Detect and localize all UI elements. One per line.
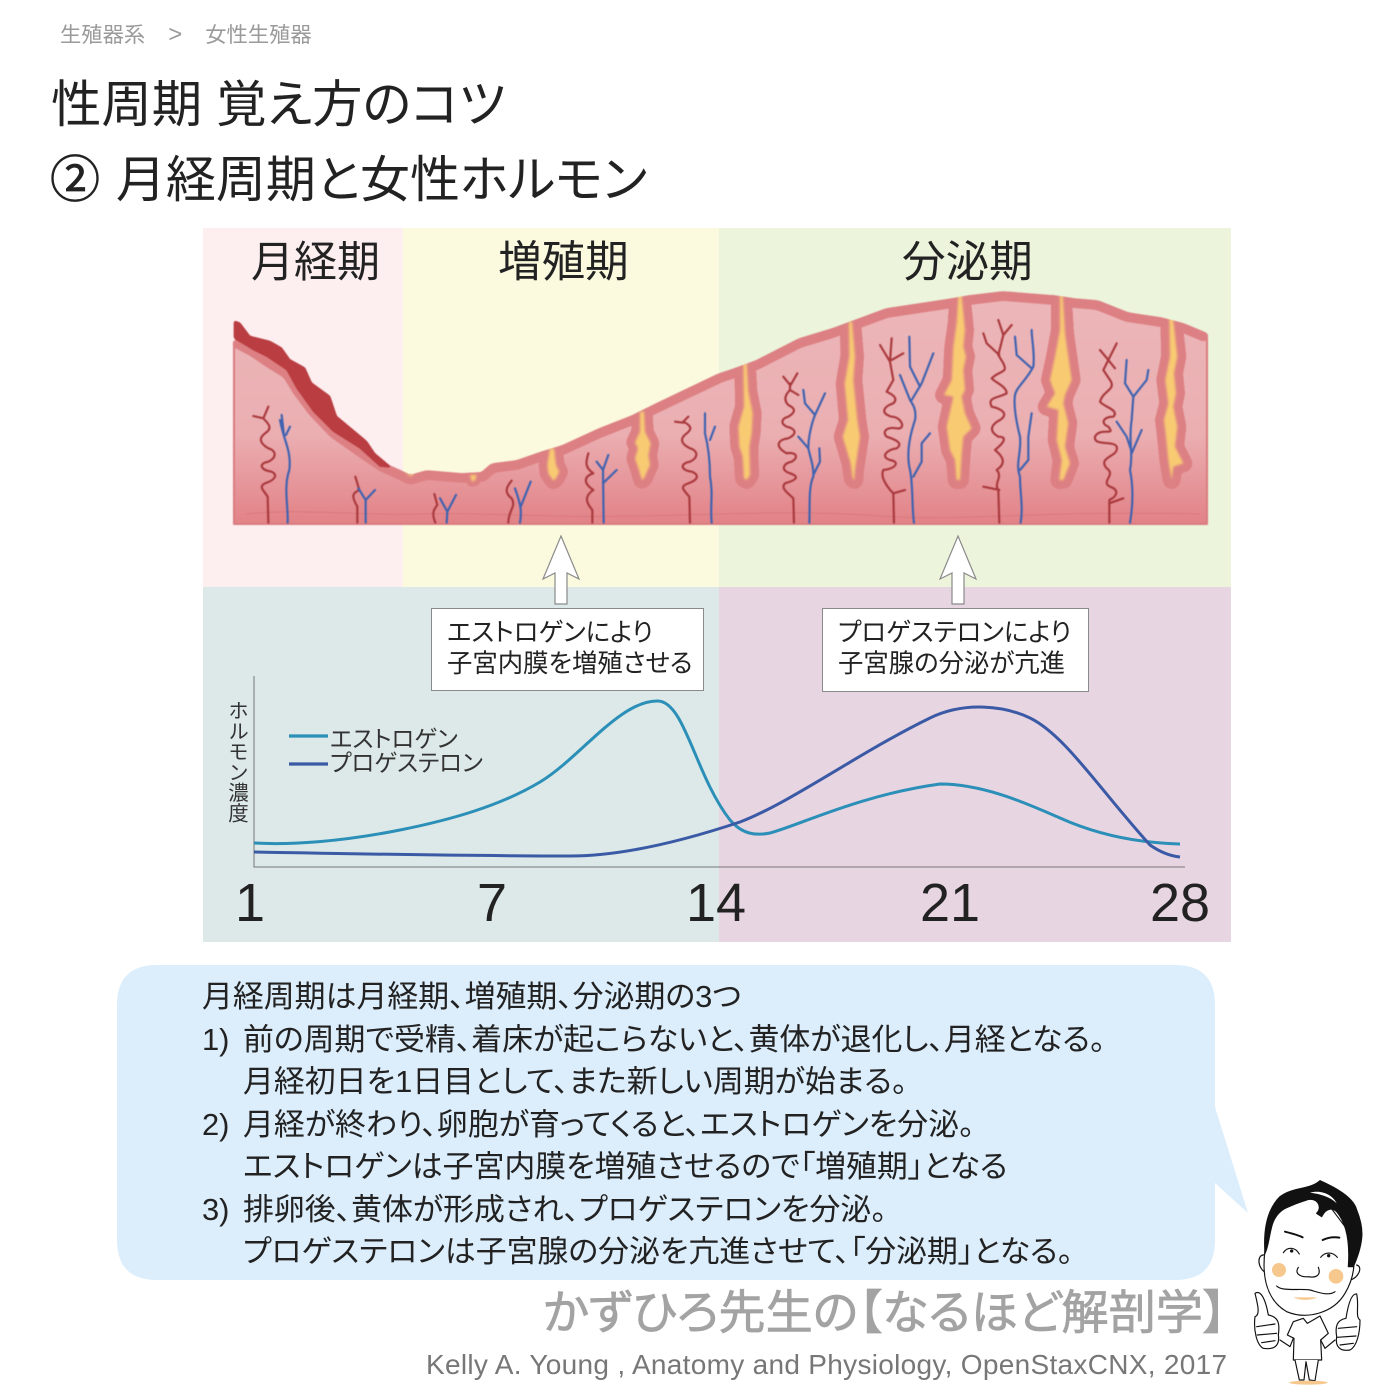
uterine glands right <box>738 293 1183 480</box>
endometrium illustration <box>234 293 1207 524</box>
callout text: progesterone <box>838 619 1071 678</box>
explanation text: 月経が終わり、卵胞が育ってくると、エストロゲンを分泌。 <box>243 1107 975 1142</box>
legend line: estrogen <box>289 734 328 738</box>
x axis tick 1: 1 <box>235 873 265 933</box>
callout text: estrogen <box>447 619 693 678</box>
character: doctor giving thumbs up <box>1255 1181 1362 1385</box>
breadcrumb: 生殖器系 > 女性生殖器 <box>60 20 312 48</box>
brand footer: かずひろ先生の【なるほど解剖学】 <box>543 1287 1227 1340</box>
vessels left half <box>253 407 715 523</box>
callout: progesterone <box>822 608 1089 692</box>
heading: proliferative phase: 増殖期 <box>498 239 629 287</box>
heading: secretory phase: 分泌期 <box>902 239 1033 287</box>
vessels right half <box>779 320 1148 523</box>
source citation: Kelly A. Young , Anatomy and Physiology, OpenStaxCNX, 2017 <box>426 1349 1227 1380</box>
explanation text: 1) <box>202 1022 229 1057</box>
x axis tick 14: 14 <box>686 873 746 933</box>
legend label: estrogen: エストロゲン <box>330 726 458 752</box>
explanation text: 2) <box>202 1107 229 1142</box>
legend line: progesterone <box>289 762 328 766</box>
title line 2: ② 月経周期と女性ホルモン <box>50 152 647 208</box>
callout text: estrogen: 子宮内膜を増殖させる <box>447 650 693 678</box>
epithelium surface layer <box>234 296 1207 480</box>
legend label: progesterone: プロゲステロン <box>330 750 483 776</box>
arrow: estrogen to proliferation <box>543 536 579 604</box>
title line 1: 性周期 覚え方のコツ <box>51 76 505 133</box>
x axis tick 7: 7 <box>477 873 507 933</box>
arrow: progesterone to secretion <box>940 536 976 604</box>
explanation text <box>202 979 1105 1269</box>
uterine glands left <box>406 412 651 481</box>
panel: menstrual phase background <box>203 228 403 587</box>
explanation text: エストロゲンは子宮内膜を増殖させるので「増殖期」となる <box>243 1149 1008 1184</box>
heading: menstrual phase: 月経期 <box>251 239 380 287</box>
panel: secretory phase background <box>719 228 1231 587</box>
speech bubble <box>117 965 1248 1280</box>
illustration and chart layer <box>117 290 1362 1385</box>
callout text: estrogen: エストロゲンにより <box>447 619 653 647</box>
progesterone curve <box>254 707 1180 857</box>
y axis label: ホルモン濃度 <box>224 700 248 823</box>
chart axes <box>254 676 1185 867</box>
panel: hormone chart right background <box>719 587 1231 942</box>
explanation text: 排卵後、黄体が形成され、プロゲステロンを分泌。 <box>243 1192 887 1227</box>
estrogen curve <box>254 701 1180 844</box>
explanation text: 月経周期は月経期、増殖期、分泌期の3つ <box>202 979 741 1014</box>
uterine glands clipped to tissue <box>406 293 1183 481</box>
panel: hormone chart left background <box>203 587 719 942</box>
shedding layer <box>234 321 392 467</box>
x axis tick 21: 21 <box>920 873 980 933</box>
callout text: progesterone: 子宮腺の分泌が亢進 <box>838 650 1065 678</box>
explanation text: プロゲステロンは子宮腺の分泌を亢進させて、「分泌期」となる。 <box>243 1234 1073 1269</box>
x axis tick 28: 28 <box>1150 873 1210 933</box>
explanation text: 前の周期で受精、着床が起こらないと、黄体が退化し、月経となる。 <box>243 1022 1105 1057</box>
panel: proliferative phase background <box>403 228 719 587</box>
explanation text: 月経初日を1日目として、また新しい周期が始まる。 <box>243 1064 907 1099</box>
callout: estrogen <box>431 608 704 691</box>
explanation text: 3) <box>202 1192 229 1227</box>
callout text: progesterone: プロゲステロンにより <box>838 619 1071 647</box>
